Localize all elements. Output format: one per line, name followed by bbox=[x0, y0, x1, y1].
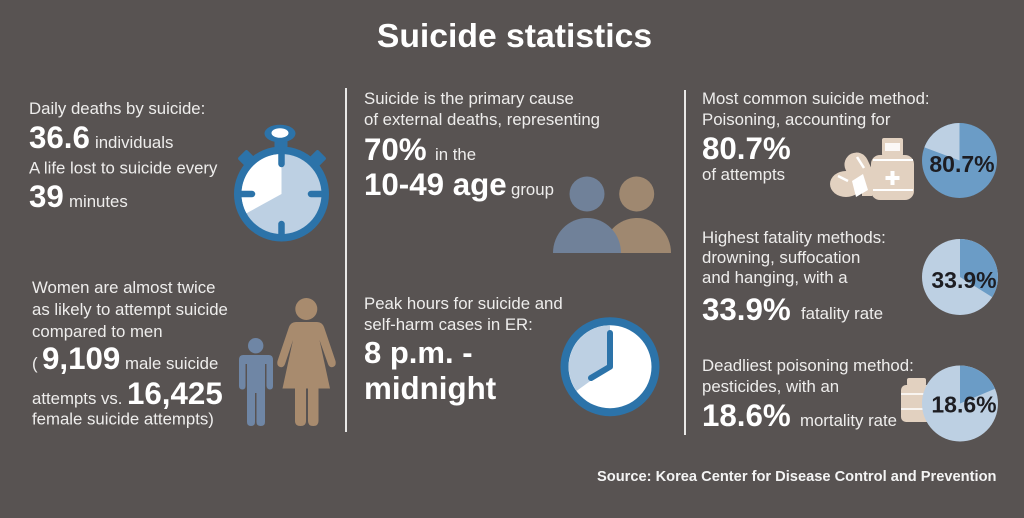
panel: gender text: male suicide bbox=[125, 354, 218, 373]
panel: common method text bbox=[702, 89, 930, 184]
panel: external deaths text bbox=[364, 89, 600, 202]
panel: common method text: 80.7% bbox=[702, 131, 791, 166]
panel: daily deaths text: individuals bbox=[95, 133, 173, 152]
panel: peak hours text: Peak hours for suicide and bbox=[364, 294, 563, 313]
panel: fatality text: Highest fatality methods: bbox=[702, 228, 886, 247]
panel: gender text: ( bbox=[32, 354, 38, 373]
icon: stopwatch bbox=[234, 125, 329, 242]
panel: pesticide text: 18.6% bbox=[702, 398, 791, 433]
chart: pie 80.7%: 80.7% bbox=[929, 151, 995, 177]
panel: external deaths text: 10-49 age bbox=[364, 167, 507, 202]
panel: common method text: of attempts bbox=[702, 165, 785, 184]
panel: common method text: Poisoning, accounting for bbox=[702, 110, 891, 129]
panel: gender text: Women are almost twice bbox=[32, 278, 215, 297]
panel: fatality text: and hanging, with a bbox=[702, 268, 848, 287]
panel: fatality text: fatality rate bbox=[801, 304, 883, 323]
panel: peak hours text: midnight bbox=[364, 371, 497, 406]
panel: gender text bbox=[32, 278, 228, 428]
panel: pesticide text bbox=[702, 356, 914, 433]
panel: daily deaths text: minutes bbox=[69, 192, 128, 211]
icon: pills and bottle bbox=[830, 138, 914, 200]
panel: external deaths text: 70% bbox=[364, 132, 427, 167]
panel: fatality text: 33.9% bbox=[702, 292, 791, 327]
divider right bbox=[684, 90, 686, 435]
divider left bbox=[345, 88, 347, 432]
chart: pie 33.9%: 33.9% bbox=[931, 267, 997, 293]
panel: gender text: compared to men bbox=[32, 322, 163, 341]
panel: daily deaths text bbox=[29, 99, 218, 214]
icon: pesticide bottle bbox=[901, 378, 935, 422]
panel: gender text: female suicide attempts) bbox=[32, 410, 214, 428]
panel: gender text: as likely to attempt suicide bbox=[32, 300, 228, 319]
panel: fatality text bbox=[702, 228, 886, 327]
icon: man and woman bbox=[239, 298, 336, 426]
panel: fatality text: drowning, suffocation bbox=[702, 248, 860, 267]
panel: gender text: 9,109 bbox=[42, 341, 120, 376]
panel: peak hours text: self-harm cases in ER: bbox=[364, 315, 533, 334]
panel: daily deaths text: Daily deaths by suicide: bbox=[29, 99, 205, 118]
icon: two people bbox=[553, 176, 671, 253]
chart: pie 18.6% bbox=[922, 366, 998, 442]
panel: external deaths text: of external deaths, representing bbox=[364, 110, 600, 129]
chart: pie 18.6%: 18.6% bbox=[931, 392, 997, 418]
panel: external deaths text: group bbox=[511, 180, 554, 199]
panel: external deaths text: in the bbox=[435, 145, 476, 164]
panel: pesticide text: mortality rate bbox=[800, 411, 897, 430]
panel: pesticide text: pesticides, with an bbox=[702, 377, 839, 396]
panel: common method text: Most common suicide method: bbox=[702, 89, 930, 108]
panel: gender text: 16,425 bbox=[127, 376, 223, 411]
panel: daily deaths text: A life lost to suicide every bbox=[29, 158, 218, 178]
icon: clock bbox=[560, 317, 660, 416]
panel: daily deaths text: 36.6 bbox=[29, 120, 90, 155]
panel: gender text: attempts vs. bbox=[32, 389, 122, 408]
panel: pesticide text: Deadliest poisoning method: bbox=[702, 356, 914, 375]
chart: pie 33.9% bbox=[922, 239, 998, 315]
panel: daily deaths text: 39 bbox=[29, 179, 64, 214]
title: Suicide statistics bbox=[377, 17, 652, 55]
source note: Source: Korea Center for Disease Control and Prevention bbox=[597, 469, 997, 485]
panel: external deaths text: Suicide is the primary cause bbox=[364, 89, 574, 108]
panel: peak hours text bbox=[364, 294, 563, 406]
panel: peak hours text: 8 p.m. - bbox=[364, 335, 473, 370]
chart: pie 80.7% bbox=[922, 123, 997, 198]
